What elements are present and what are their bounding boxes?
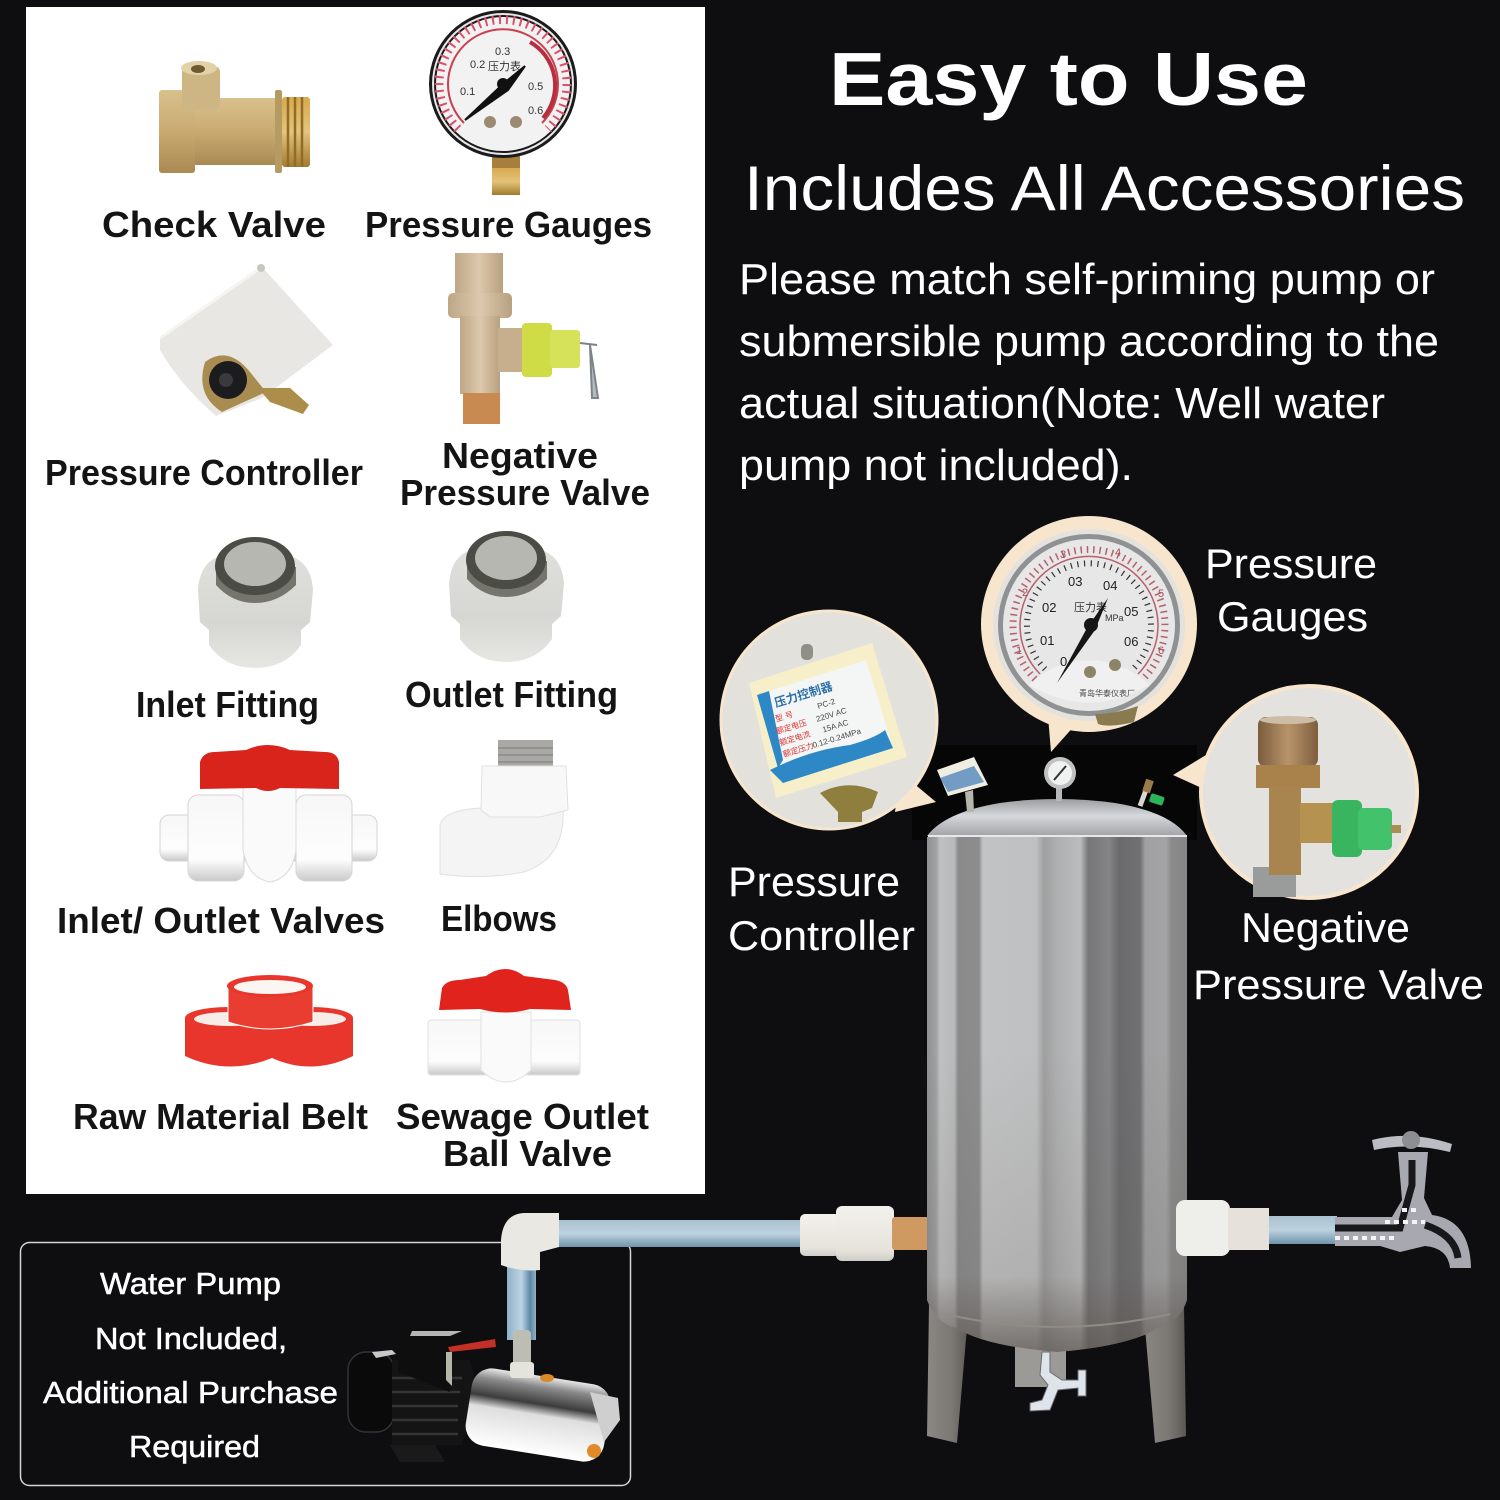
icon: pressure gauge: 0.6 xyxy=(528,105,543,117)
callout: pressure gauge: 3 xyxy=(1060,549,1066,561)
label: pressure controller: Pressure Controller xyxy=(45,452,363,493)
label: outlet fitting: Outlet Fitting xyxy=(405,674,618,715)
label: negative pressure valve callout xyxy=(1193,904,1484,1008)
callout: pressure controller: 型 号 xyxy=(774,710,794,724)
label: negative pressure valve: Pressure Valve xyxy=(400,472,650,513)
callout: pressure gauge: 04 xyxy=(1103,578,1117,593)
icon: raw material belt xyxy=(185,975,353,1067)
callout: pressure gauge: 压力表 xyxy=(1074,600,1107,614)
callout: pressure gauge: 2 xyxy=(1022,587,1028,599)
water pump note box: Required xyxy=(129,1429,260,1464)
tank fittings xyxy=(937,757,1165,812)
label: check valve: Check Valve xyxy=(102,204,326,245)
label: pressure controller callout: Pressure xyxy=(728,858,900,905)
callout: pressure gauge: 6 xyxy=(1158,645,1164,657)
panel: accessories list xyxy=(26,7,705,1194)
callout: pressure gauge: 06 xyxy=(1124,634,1138,649)
icon: pressure gauge: 0.5 xyxy=(528,81,543,93)
icon: elbow xyxy=(440,740,568,877)
callout: pressure controller: PC-2 xyxy=(816,697,837,711)
icon: pressure gauge: 0.3 xyxy=(495,46,510,58)
callout: pressure gauge: MPa xyxy=(1105,613,1124,623)
callout: pressure controller: 15A AC xyxy=(821,718,850,734)
label: negative pressure valve xyxy=(400,435,650,513)
outlet pipe and faucet xyxy=(1176,1131,1471,1268)
icon: pressure gauge xyxy=(429,10,577,195)
callout: pressure gauge: 02 xyxy=(1042,600,1056,615)
water pump note box xyxy=(20,1242,630,1486)
callout: pressure gauge: 01 xyxy=(1040,633,1054,648)
icon: outlet fitting xyxy=(449,531,564,662)
callout: pressure controller: 压力控制器 xyxy=(772,678,834,710)
callout: pressure gauge: 03 xyxy=(1068,574,1082,589)
label: negative pressure valve: Negative xyxy=(442,435,598,476)
callout: pressure gauge: 4 xyxy=(1115,547,1121,559)
label: pressure gauges callout: Gauges xyxy=(1217,593,1368,640)
label: pressure gauges: Pressure Gauges xyxy=(365,204,652,245)
label: negative pressure valve callout: Negative xyxy=(1241,904,1410,951)
description text: Please match self-priming pump or xyxy=(739,255,1435,304)
subtitle: Includes All Accessories xyxy=(744,154,1465,224)
icon: check valve xyxy=(159,61,310,173)
icon: pressure controller xyxy=(160,264,333,416)
icon: sewage outlet ball valve xyxy=(428,969,580,1082)
description text xyxy=(739,255,1439,490)
label: raw material belt: Raw Material Belt xyxy=(73,1096,368,1137)
label: pressure controller callout xyxy=(728,858,915,959)
description text: actual situation(Note: Well water xyxy=(739,379,1385,428)
callout: pressure controller xyxy=(721,611,937,829)
label: pressure controller callout: Controller xyxy=(728,912,915,959)
label: sewage outlet ball valve: Ball Valve xyxy=(443,1133,612,1174)
label: inlet fitting: Inlet Fitting xyxy=(136,684,319,725)
label: pressure gauges callout xyxy=(1205,540,1377,640)
inlet pipe xyxy=(501,1206,946,1340)
icon: inlet fitting xyxy=(198,537,313,668)
tank xyxy=(927,757,1187,1443)
callout: pressure controller: 220V AC xyxy=(815,706,848,724)
callout: pressure gauge: 5 xyxy=(1158,588,1164,600)
callout: pressure gauge: 青岛华泰仪表厂 xyxy=(1079,688,1135,698)
callout: pressure gauge xyxy=(981,516,1197,752)
icon: inlet and outlet valves xyxy=(160,745,377,882)
callout: pressure controller: 0.12-0.24MPa xyxy=(811,727,863,750)
label: sewage outlet ball valve: Sewage Outlet xyxy=(396,1096,649,1137)
description text: submersible pump according to the xyxy=(739,317,1439,366)
water pump note box: Not Included, xyxy=(95,1321,287,1356)
icon: pressure gauge: 0.1 xyxy=(460,86,475,98)
callout: pressure gauge: 0 xyxy=(1060,654,1067,669)
icon: negative pressure valve xyxy=(448,253,598,424)
label: pressure gauges callout: Pressure xyxy=(1205,540,1377,587)
label: inlet and outlet valves: Inlet/ Outlet Valves xyxy=(57,900,385,941)
water pump note box: Additional Purchase xyxy=(43,1375,338,1410)
callout: pressure controller: 额定电流 xyxy=(778,729,812,748)
description text: pump not included). xyxy=(739,441,1133,490)
label: sewage outlet ball valve xyxy=(396,1096,649,1174)
callout: negative pressure valve xyxy=(1173,686,1417,898)
icon: pressure gauge: 压力表 xyxy=(488,59,521,73)
icon: pressure gauge: 0.2 xyxy=(470,59,485,71)
callout: pressure controller: 额定电压 xyxy=(774,717,808,736)
label: negative pressure valve callout: Pressure Valve xyxy=(1193,961,1484,1008)
callout: pressure gauge: 1 xyxy=(1016,645,1022,657)
callout: pressure controller: 额定压力 xyxy=(781,740,815,759)
icon: water pump xyxy=(348,1330,620,1464)
label: elbows: Elbows xyxy=(441,898,557,939)
callout: pressure gauge: 05 xyxy=(1124,604,1138,619)
water pump note box: Water Pump xyxy=(100,1266,281,1301)
title: Easy to Use xyxy=(829,37,1308,121)
